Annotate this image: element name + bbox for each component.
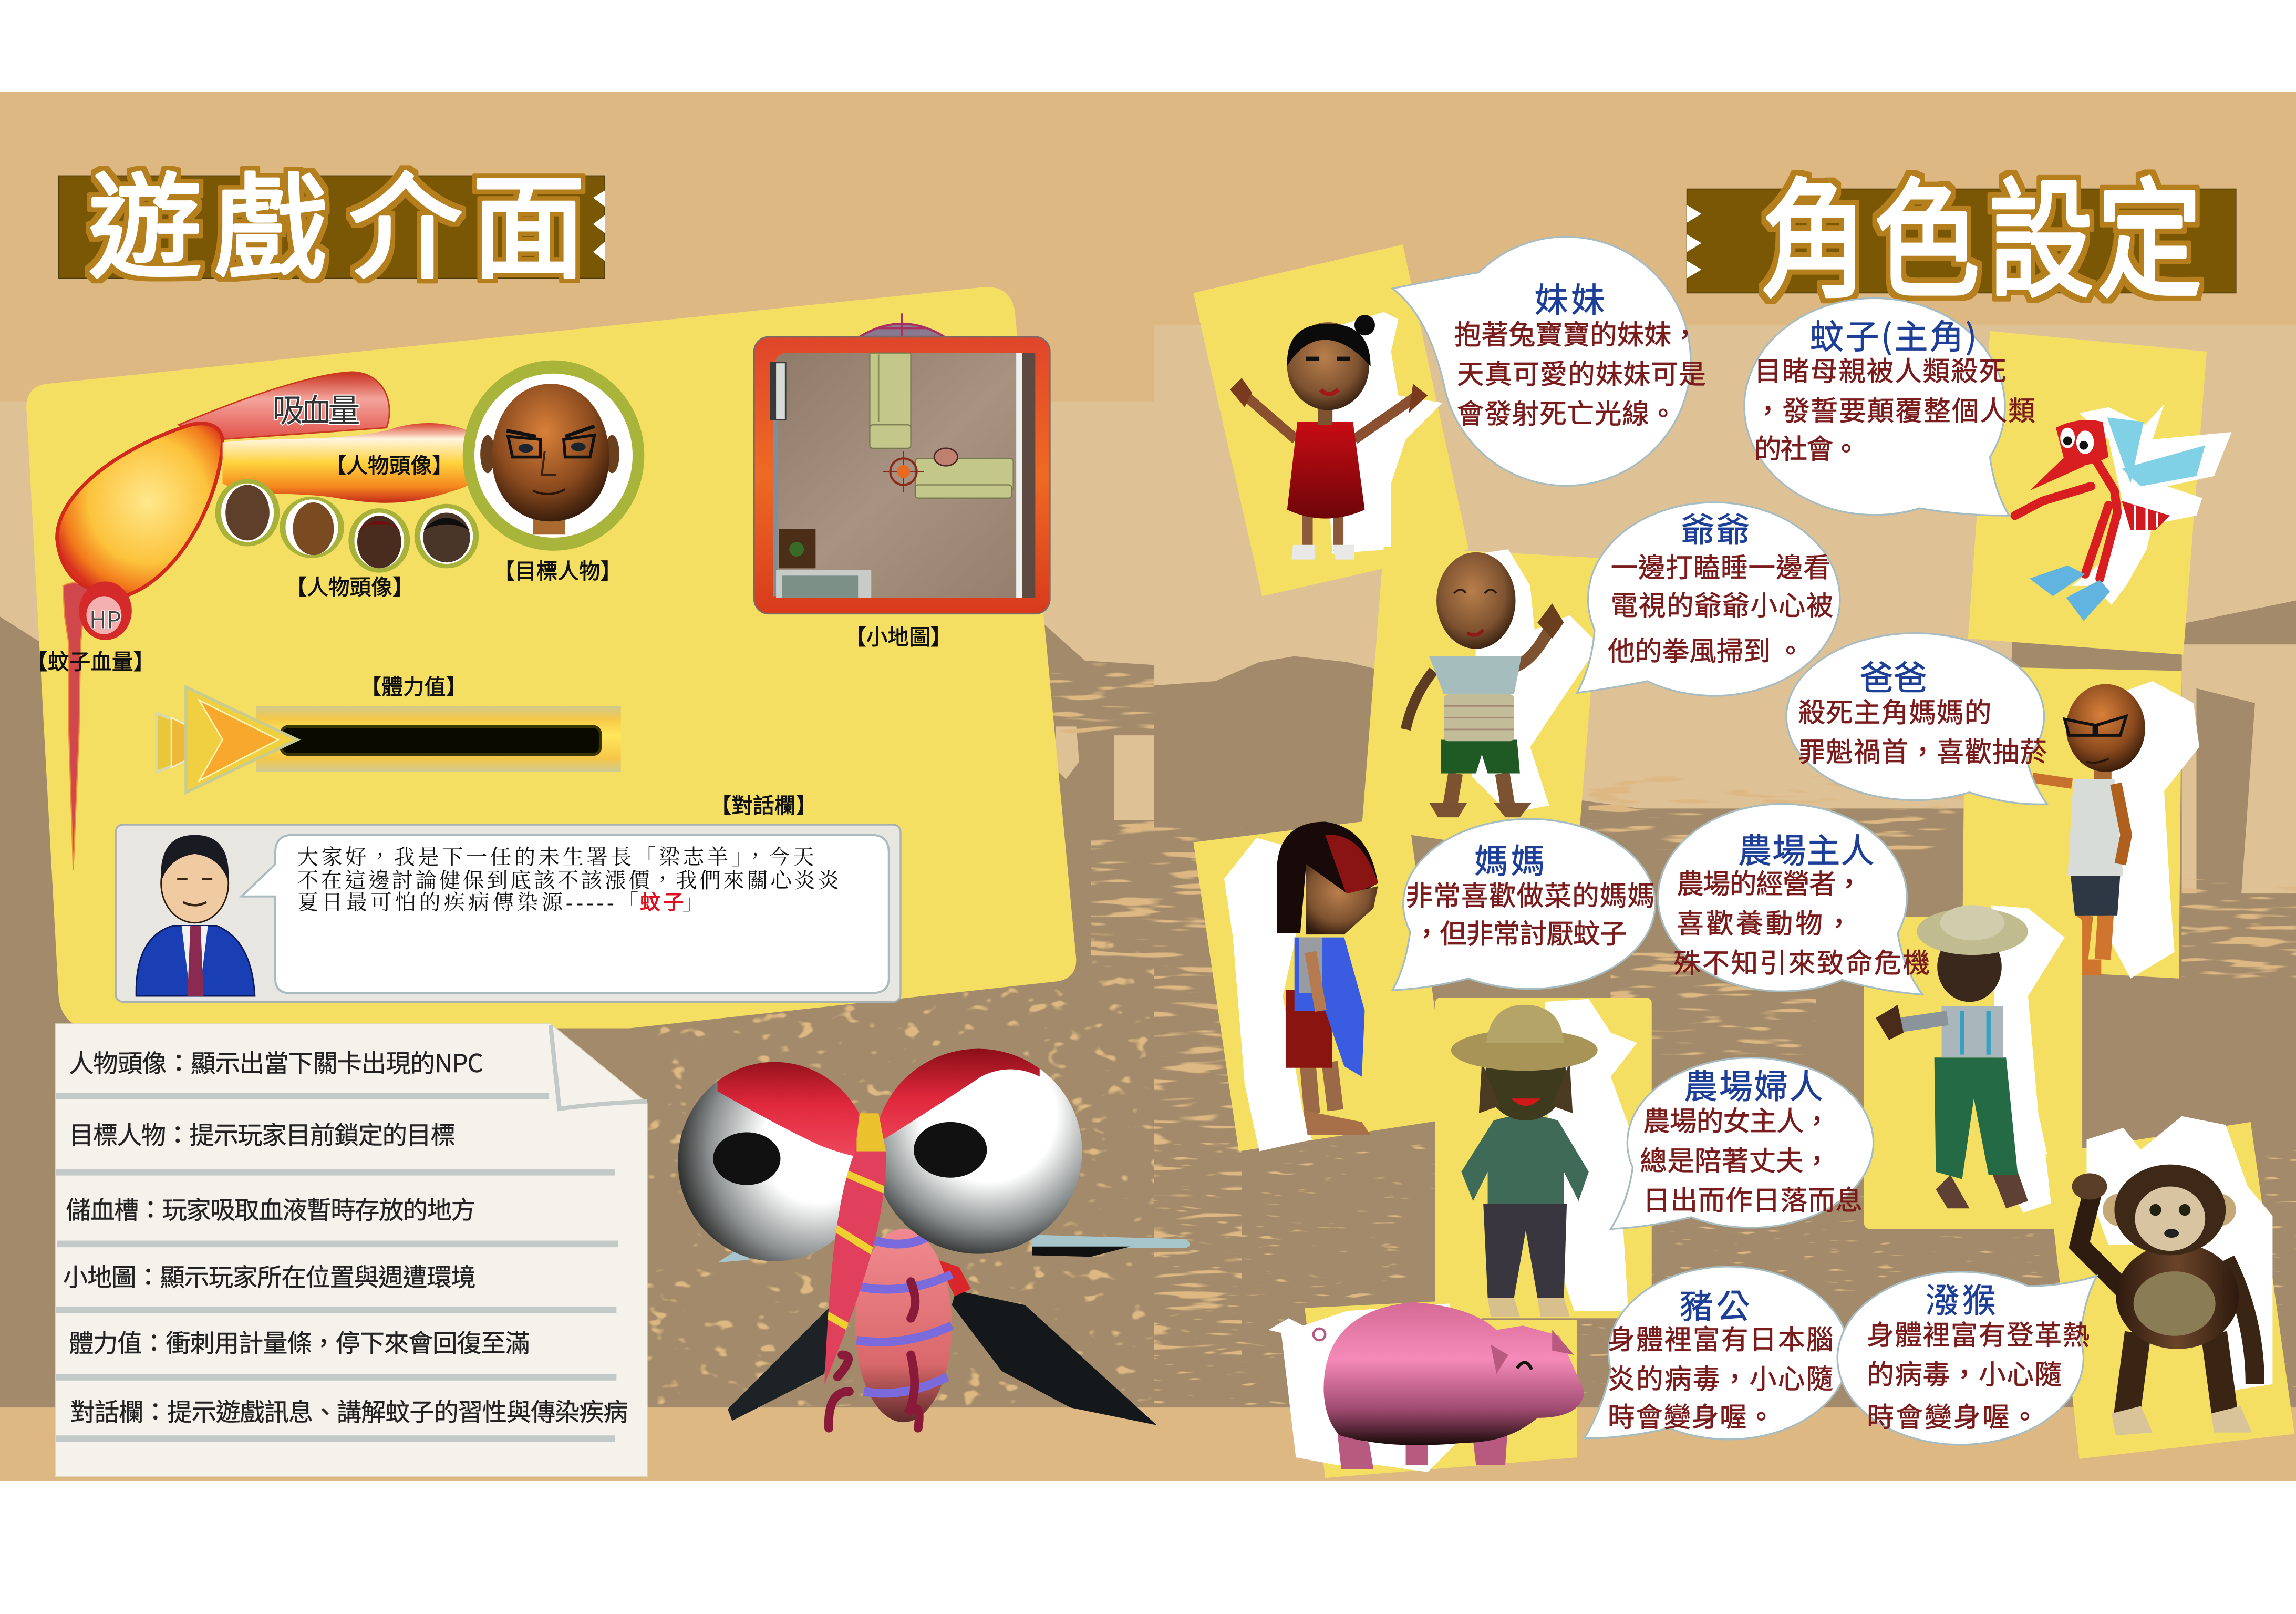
speech bubble: farm owner: [1658, 804, 1930, 994]
speech bubble: mother: ，但非常討厭蚊子: [1413, 912, 1627, 951]
speech bubble: monkey: 身體裡富有登革熱: [1867, 1313, 2090, 1352]
HUD: mosquito status gauge: [57, 361, 644, 870]
character: [2015, 417, 2205, 621]
cut-out silhouette: [1224, 838, 1312, 1152]
speech bubble: mosquito hero: 的社會。: [1754, 427, 1859, 466]
dialog text: [297, 845, 840, 916]
speech bubble: little sister: 天真可愛的妹妹可是: [1457, 352, 1706, 392]
stamina gauge: [157, 687, 621, 793]
character: [2032, 684, 2145, 975]
panel: notes sheet: [56, 1024, 647, 1476]
speech bubble: farm wife: [1611, 1058, 1874, 1229]
speech bubble: grandfather: 電視的爺爺小心被: [1611, 584, 1833, 623]
legs: [829, 1282, 919, 1428]
card: grandfather: [1362, 547, 1602, 860]
label: dialog: 【對話欄】: [710, 788, 817, 819]
speech bubble: father: 殺死主角媽媽的: [1798, 691, 1991, 730]
pupils: [713, 1132, 780, 1185]
note lines: 人物頭像：顯示出當下關卡出現的NPC: [69, 1043, 483, 1080]
speech bubble: little sister: 抱著兔寶寶的妹妹，: [1454, 313, 1699, 352]
label: minimap: 【小地圖】: [845, 620, 952, 651]
note lines: [63, 1043, 628, 1428]
cut-out silhouette: [1268, 1303, 1464, 1472]
blood bag: [57, 424, 223, 596]
speech bubble: farm wife: 總是陪著丈夫，: [1640, 1139, 1830, 1178]
dialog box: [116, 825, 901, 1002]
left eyelid: [718, 1062, 860, 1156]
label: target: 【目標人物】: [493, 554, 622, 585]
note lines: 對話欄：提示遊戲訊息、講解蚊子的習性與傳染疾病: [70, 1392, 628, 1428]
target reticle: [883, 451, 924, 492]
HP bulb: [79, 581, 132, 640]
right eye: [874, 1048, 1082, 1254]
speech bubble: farm owner: 農場的經營者，: [1677, 862, 1863, 901]
speech bubble: mosquito hero: 目睹母親被人類殺死: [1754, 349, 2006, 389]
note lines: 小地圖：顯示玩家所在位置與週遭環境: [63, 1257, 476, 1293]
dialog text: 大家好，我是下一任的未生署長「梁志羊」，今天: [297, 845, 814, 869]
target portrait: [463, 361, 644, 551]
speech bubble: little sister: 妹妹: [1535, 274, 1605, 322]
speech bubble: farm wife: 日出而作日落而息: [1643, 1178, 1863, 1218]
blood storage organ: [179, 372, 389, 439]
sofas: [870, 353, 1013, 498]
dialog text: 夏日最可怕的疾病傳染源-----「: [297, 891, 638, 914]
proboscis: [824, 1113, 886, 1384]
speech bubble: monkey: 潑猴: [1926, 1274, 1996, 1322]
speech bubble: mother: [1392, 819, 1655, 990]
speech bubble: pig: 時會變身喔。: [1608, 1395, 1775, 1435]
table: [779, 529, 815, 568]
character: [1451, 1005, 1598, 1317]
card: little sister: [1193, 244, 1468, 596]
label: portraits: 【人物頭像】: [285, 570, 414, 601]
right eyelid: [880, 1049, 1040, 1139]
speech bubble: father: [1786, 633, 2047, 804]
card: farm wife: [1435, 998, 1652, 1318]
speech bubble: mosquito hero: [1744, 298, 2035, 516]
dialog text: 」: [682, 891, 704, 914]
dialog text: 蚊子: [640, 887, 684, 916]
speech bubble: farm owner: 殊不知引來致命危機: [1674, 941, 1930, 981]
speech bubble: farm wife: 農場婦人: [1684, 1060, 1823, 1108]
label: blood amount: 吸血量: [272, 385, 360, 431]
character: [1406, 552, 1564, 817]
label: portrait bar: 【人物頭像】: [325, 448, 453, 479]
note lines: 體力值：衝刺用計量條，停下來會回復至滿: [69, 1323, 530, 1359]
speech bubble: grandfather: 一邊打瞌睡一邊看: [1611, 546, 1830, 585]
speech bubble: monkey: [1837, 1272, 2097, 1445]
character: [1230, 315, 1428, 560]
cut-out silhouette: [1472, 549, 1599, 813]
speech bubble: grandfather: 他的拳風掃到 。: [1608, 629, 1804, 669]
proboscis blood meter: [63, 583, 88, 870]
speech bubble: mosquito hero: ，發誓要顛覆整個人類: [1754, 389, 2035, 428]
cut-out silhouette: [1545, 999, 1640, 1311]
speech bubble: mother: 媽媽: [1474, 835, 1545, 883]
title: game interface: 遊戲介面: [88, 136, 586, 301]
cut-out silhouette: [1991, 905, 2065, 1213]
speech bubble: pig: 豬公: [1680, 1280, 1750, 1328]
character: [2072, 1165, 2255, 1435]
speech bubble: little sister: [1392, 237, 1706, 486]
left eye: [678, 1062, 871, 1261]
cut-out silhouette: [2108, 681, 2199, 979]
character: [1314, 1302, 1585, 1469]
speech bubble: grandfather: [1577, 502, 1840, 696]
label: mosquito blood: 【蚊子血量】: [26, 645, 154, 676]
panel: yellow game interface card: [26, 287, 1076, 1028]
NPC portrait bar: [223, 423, 488, 503]
body: [855, 1229, 952, 1422]
note lines: 目標人物：提示玩家目前鎖定的目標: [69, 1115, 456, 1152]
speech bubble: little sister: 會發射死亡光線。: [1457, 392, 1677, 431]
speech bubble: father: 爸爸: [1859, 652, 1927, 700]
character: [1277, 822, 1378, 1135]
speech bubble: farm owner: 農場主人: [1738, 825, 1874, 873]
speech bubble: farm wife: 農場的女主人，: [1643, 1099, 1830, 1139]
speech area: [242, 835, 889, 993]
card: mother: [1193, 816, 1450, 1152]
speech bubble: monkey: 時會變身喔。: [1867, 1395, 2038, 1435]
NPC portrait: official in blue suit: [136, 835, 255, 996]
minimap: [754, 313, 1050, 614]
cut-out silhouette: [1325, 312, 1442, 553]
speech bubble: monkey: 的病毒，小心隨: [1867, 1353, 2062, 1392]
card: monkey: [2045, 1116, 2294, 1459]
label: stamina: 【體力值】: [360, 670, 467, 701]
dialog text: 不在這邊討論健保到底該不該漲價，我們來關心炎炎: [297, 869, 840, 892]
title: character setting: 角色設定: [1762, 137, 2202, 323]
speech bubble: pig: 身體裡富有日本腦: [1608, 1318, 1833, 1357]
card: father: [1962, 666, 2199, 979]
cut-out silhouette: [2072, 404, 2231, 605]
card: farm owner: [1864, 905, 2082, 1229]
wings: [718, 1235, 1190, 1262]
small portraits: [215, 479, 479, 573]
speech bubble: father: 罪魁禍首，喜歡抽菸: [1798, 730, 2047, 769]
speech bubble: farm owner: 喜歡養動物，: [1677, 901, 1853, 941]
card: pig: [1268, 1299, 1585, 1478]
card: mosquito hero: [1968, 331, 2231, 655]
HP bulb: HP: [89, 601, 121, 635]
player sprite: [934, 448, 958, 466]
speech bubble: mosquito hero: 蚊子(主角): [1810, 310, 1977, 358]
speech bubble: pig: [1585, 1267, 1849, 1440]
speech bubble: mother: 非常喜歡做菜的媽媽: [1406, 873, 1654, 913]
big 3D mosquito: [678, 1040, 1190, 1428]
speech bubble: pig: 炎的病毒，小心隨: [1608, 1357, 1833, 1396]
character: [1876, 905, 2028, 1208]
stripes: [856, 1233, 952, 1393]
note lines: 儲血槽：玩家吸取血液暫時存放的地方: [66, 1190, 476, 1226]
counter: [776, 570, 871, 598]
cut-out silhouette: [2086, 1116, 2272, 1392]
speech bubble: grandfather: 爺爺: [1681, 503, 1750, 552]
